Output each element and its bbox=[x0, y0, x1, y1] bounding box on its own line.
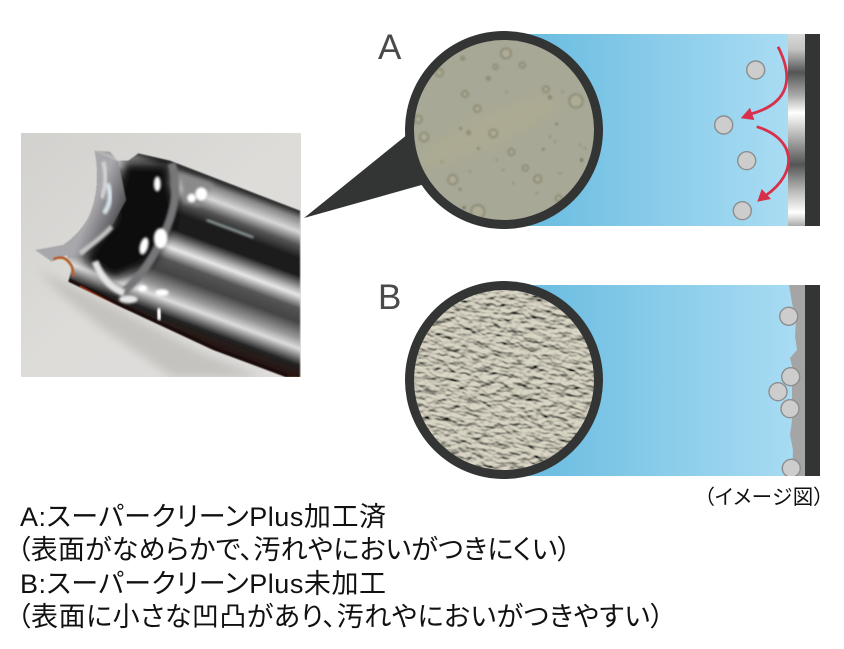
label B: B bbox=[378, 278, 401, 317]
rough grey wall B bbox=[789, 285, 806, 476]
attached dirt particles B bbox=[769, 307, 800, 477]
inner rim face bbox=[35, 151, 126, 262]
dirt particles A bbox=[715, 61, 765, 220]
panel B: rough surface diagram bbox=[520, 285, 820, 477]
metallic wall A bbox=[788, 34, 805, 226]
glass neck dark zone bbox=[83, 162, 175, 280]
caption line A detail: （表面がなめらかで、汚れやにおいがつきにくい） bbox=[17, 535, 571, 565]
magnifier A: smooth coating micrograph bbox=[405, 31, 603, 229]
arrows: dirt falling away bbox=[741, 47, 789, 202]
label A: A bbox=[378, 28, 402, 67]
water gradient A bbox=[520, 34, 788, 226]
water gradient B bbox=[520, 285, 800, 476]
caption text bbox=[17, 502, 664, 632]
photo: glass tube fragment with shiny coating bbox=[21, 133, 303, 380]
caption line B: B:スーパークリーンPlus未加工 bbox=[20, 569, 386, 599]
image note: （イメージ図） bbox=[704, 486, 824, 509]
caption line A: A:スーパークリーンPlus加工済 bbox=[20, 502, 386, 532]
dark outer layer B bbox=[805, 285, 820, 476]
panel A: smooth surface diagram bbox=[520, 34, 820, 226]
callout pointer to magnified view bbox=[304, 134, 425, 218]
magnifier B: rough surface micrograph bbox=[405, 281, 603, 479]
dark outer layer A bbox=[805, 34, 820, 226]
caption line B detail: （表面に小さな凹凸があり、汚れやにおいがつきやすい） bbox=[17, 602, 664, 632]
